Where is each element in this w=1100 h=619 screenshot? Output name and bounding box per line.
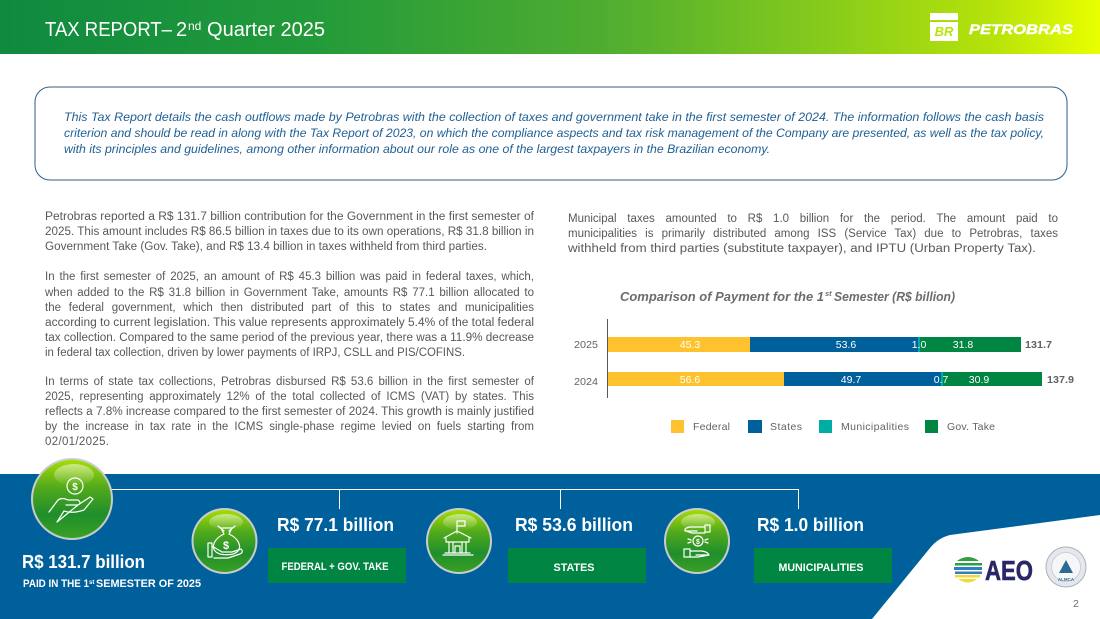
chart title: Comparison of Payment for the 1 (620, 290, 824, 304)
bar: 2024: 49.7 (841, 374, 861, 386)
stat: municipalities: R$ 1.0 billion (757, 515, 864, 535)
stat: states (508, 515, 646, 583)
total value: R$ 131.7 billion (22, 552, 145, 572)
icon: money bag (192, 508, 258, 574)
stat: municipalities (754, 515, 892, 583)
icon: money bag: $ (223, 540, 229, 552)
bottom band (0, 474, 1100, 619)
text block: left column: in federal tax collection, driven by lower payments of IRPJ, CSLL and PIS/COFINS. (45, 347, 465, 359)
text block: left column: according to current legislation. This value represents approximately 5.4% of the total federal (45, 317, 534, 329)
bar: 2025: 31.8 (953, 339, 973, 351)
total value (22, 552, 201, 590)
total value: st (89, 580, 94, 586)
intro callout: with its principles and guidelines, among other information about our role as one of the largest taxpayers in the Brazilian economy. (64, 144, 770, 156)
text block: left column: 2025, representing approximately 12% of the total collected of ICMS (VAT) by states. This (45, 391, 534, 403)
page number: 2 (1073, 598, 1079, 610)
icon: hand with coin: $ (72, 482, 78, 493)
stat: states: STATES (554, 562, 594, 574)
bar: 2025: 1.0 (912, 339, 926, 351)
logo: Petrobras: PETROBRAS (969, 21, 1074, 37)
text block: left column: reflects a 7.8% increase compared to the first semester of 2024. This growth is mainly justified (45, 406, 534, 418)
chart legend: Municipalities (841, 421, 909, 433)
text block: left column: when added to the R$ 31.8 billion in Government Take, amounts R$ 77.1 billion allocated to (45, 287, 534, 299)
text block: left column: In the first semester of 2025, an amount of R$ 45.3 billion was paid in federal taxes, which, (45, 271, 534, 283)
chart title: st (825, 289, 832, 298)
title (45, 19, 325, 41)
icon: hand with coin (31, 458, 113, 540)
chart legend: States (770, 421, 802, 433)
stat: federal + gov take (268, 515, 406, 583)
logo: Petrobras: BR (935, 24, 954, 39)
connector lines (110, 490, 798, 509)
chart legend: Gov. Take (947, 421, 995, 433)
intro callout: This Tax Report details the cash outflows made by Petrobras with the collection of taxes and government take in the first semester of 2024. The information follows the cash basis (64, 112, 1044, 124)
chart title: Semester (R$ billion) (834, 290, 955, 304)
text block: right column: withheld from third parties (substitute taxpayer), and IPTU (Urban Property Tax). (567, 243, 1036, 255)
icon: hands exchanging coin (664, 508, 730, 574)
bar: 2025 (574, 337, 1052, 352)
text block: left column (45, 211, 535, 448)
text block: left column: Government Take (Gov. Take), and R$ 13.4 billion in taxes withheld from third parties. (45, 241, 487, 253)
text block: right column: Municipal taxes amounted to R$ 1.0 billion for the period. The amount paid to (568, 213, 1058, 225)
title: TAX REPORT– (45, 19, 173, 41)
chart title (620, 289, 955, 304)
bar: 2024: 30.9 (969, 374, 989, 386)
stat: municipalities: MUNICIPALITIES (778, 562, 864, 574)
text block: left column: 02/01/2025. (45, 436, 109, 448)
total value: SEMESTER OF 2025 (96, 578, 201, 590)
bar: 2025: 131.7 (1025, 339, 1052, 351)
chart legend: Federal (693, 421, 730, 433)
bar: 2024: 56.6 (680, 374, 700, 386)
stat: states: R$ 53.6 billion (515, 515, 633, 535)
bar: 2024: 137.9 (1047, 374, 1074, 386)
icon: government building (426, 508, 492, 574)
seal: ALMCA (1058, 577, 1075, 582)
icon: hands exchanging coin: $ (696, 539, 700, 546)
bar: 2025: 45.3 (680, 339, 700, 351)
text block: left column: tax collection. Compared to the same period of the previous year, there was a 11.9% decrease (45, 332, 534, 344)
chart legend (671, 420, 995, 433)
bar: 2025: 53.6 (836, 339, 856, 351)
bar: 2024: 2024 (574, 376, 598, 388)
stat: federal + gov take: FEDERAL + GOV. TAKE (282, 561, 388, 573)
text block: left column: Petrobras reported a R$ 131.7 billion contribution for the Government in the first semester of (45, 211, 535, 223)
text block: right column (567, 212, 1058, 255)
title: nd (188, 19, 201, 33)
intro callout: criterion and should be read in along with the Tax Report of 2023, on which the compliance aspects and tax risk management of the Company are presented, as well as the tax policy, (64, 128, 1044, 140)
text block: left column: In terms of state tax collections, Petrobras disbursed R$ 53.6 billion in the first semester of (45, 376, 534, 388)
bar: 2024: 0.7 (934, 374, 948, 386)
title: 2 (176, 19, 187, 41)
stat: federal + gov take: R$ 77.1 billion (277, 515, 394, 535)
text block: left column: the federal government, which then distributed part of this to states and municipalities (45, 302, 534, 314)
total value: PAID IN THE 1 (23, 578, 89, 590)
stacked bar chart (574, 319, 1074, 398)
text block: right column: municipalities is primarily distributed among ISS (Service Tax) due to Petrobras, taxes (568, 228, 1058, 240)
intro callout (35, 87, 1067, 180)
title: Quarter 2025 (207, 19, 325, 41)
logo: AEO (954, 555, 1033, 586)
text block: left column: by the increase in tax rate in the ICMS single-phase regime levied on fuels starting from (45, 421, 534, 433)
seal (1046, 547, 1086, 587)
header band (0, 0, 1100, 54)
logo: Petrobras (930, 13, 1074, 41)
bar: 2025: 2025 (574, 339, 598, 351)
text block: left column: 2025. This amount includes R$ 86.5 billion in taxes due to its own operations, R$ 31.8 billion in (45, 226, 534, 238)
logo: AEO: AEO (985, 555, 1033, 586)
bar: 2024 (574, 372, 1074, 388)
